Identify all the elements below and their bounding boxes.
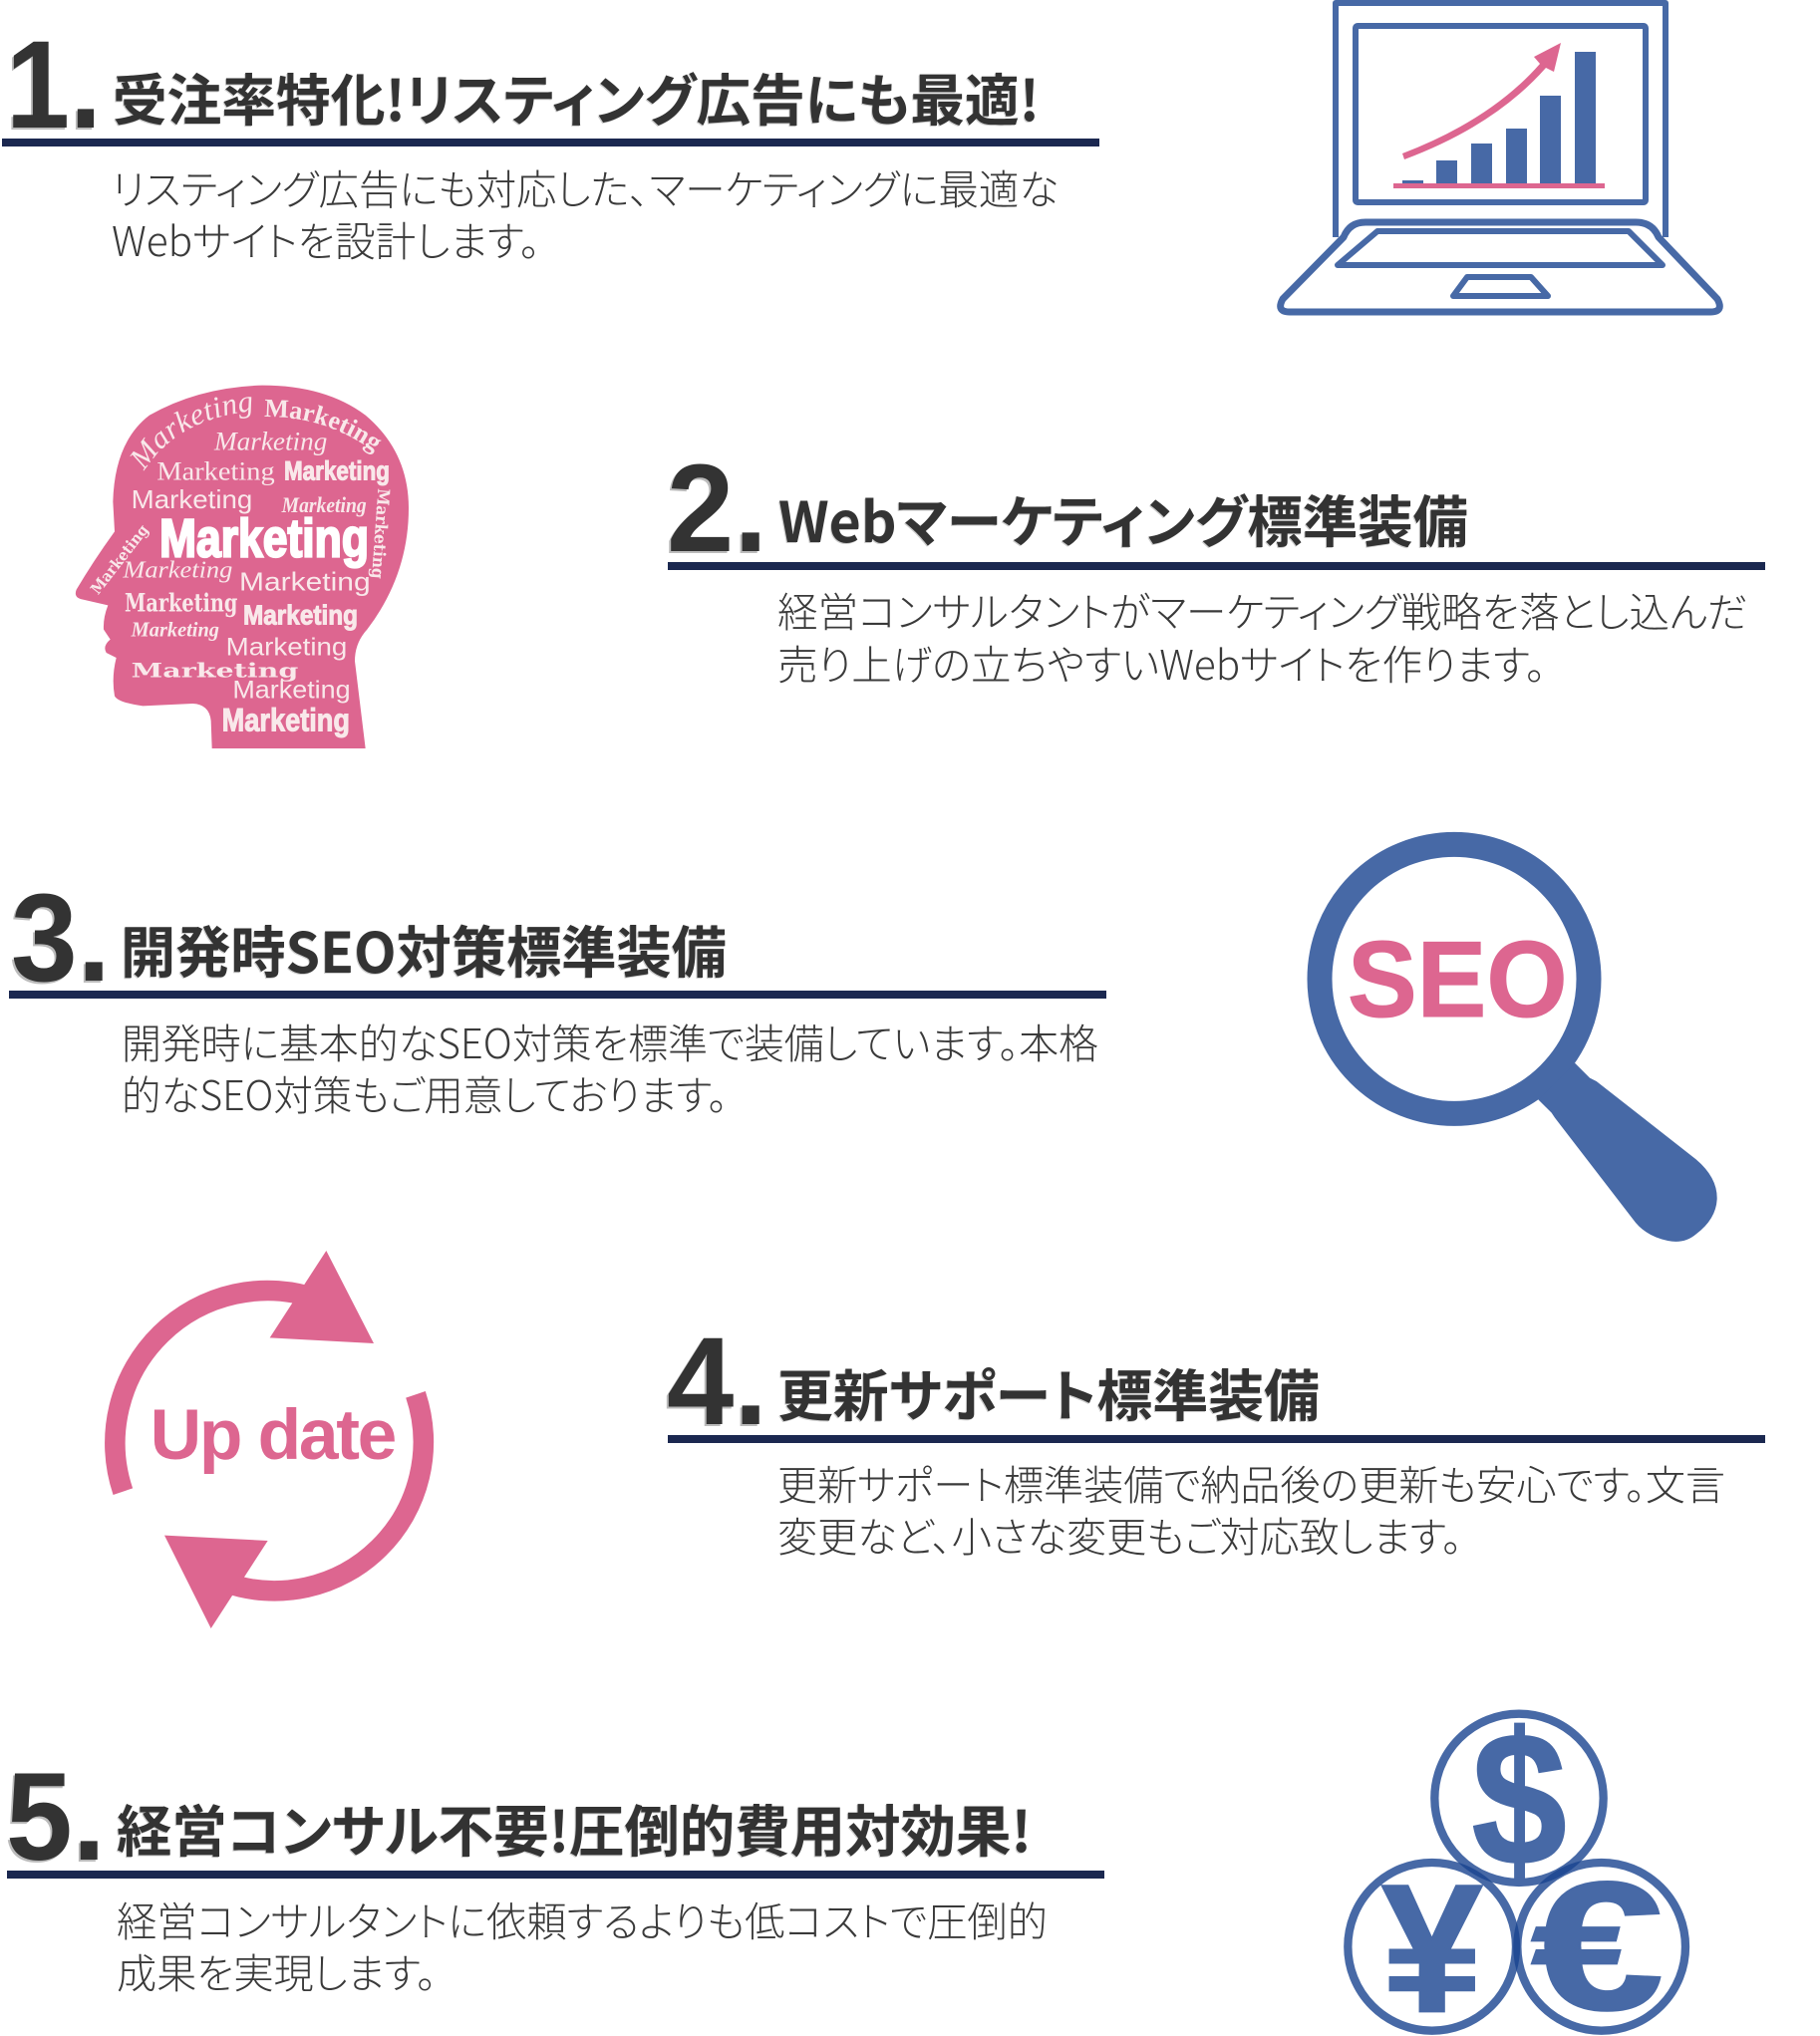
number 4: 4. xyxy=(667,1312,767,1451)
word cloud: Marketing xyxy=(132,659,299,682)
number 5: 5. xyxy=(6,1748,106,1887)
word cloud: Marketing xyxy=(226,634,347,661)
body text 2: 売り上げの立ちやすいWebサイトを作ります。 xyxy=(777,632,1546,692)
growth arrow xyxy=(1402,43,1561,159)
icon: head with marketing words xyxy=(76,385,409,748)
panel: section 2 web marketing xyxy=(667,439,1765,692)
number 3: 3. xyxy=(11,869,111,1008)
word cloud: Marketing xyxy=(243,600,358,631)
icon: magnifying glass seo xyxy=(1320,844,1717,1242)
dollar symbol: $ xyxy=(1472,1694,1567,1905)
panel: section 1 listing ads xyxy=(2,16,1099,268)
body text 5: 成果を実現します。 xyxy=(117,1940,437,2000)
body text 1: Webサイトを設計します。 xyxy=(112,208,540,268)
word cloud: Marketing xyxy=(122,557,232,583)
body text 3 xyxy=(122,1011,1098,1122)
heading 2: Webマーケティング標準装備 xyxy=(778,478,1468,559)
word cloud: Marketing xyxy=(264,399,381,454)
word cloud xyxy=(87,397,394,737)
body text 2: 経営コンサルタントがマーケティング戦略を落とし込んだ xyxy=(777,579,1748,639)
icon: currency coins xyxy=(1348,1694,1685,2036)
body text 3: 的なSEO対策もご用意しております。 xyxy=(122,1062,728,1122)
chart bars xyxy=(1402,52,1596,184)
icon: laptop with growth chart xyxy=(1281,3,1719,312)
body text 1: リスティング広告にも対応した、マーケティングに最適な xyxy=(112,156,1059,216)
word cloud: Marketing xyxy=(213,427,327,456)
seo label: SEO xyxy=(1348,920,1568,1040)
word cloud: Marketing xyxy=(132,484,252,514)
body text 5 xyxy=(117,1889,1048,2000)
number 1: 1. xyxy=(6,16,102,154)
body text 2 xyxy=(777,579,1748,692)
body text 4: 更新サポート標準装備で納品後の更新も安心です。文言 xyxy=(777,1452,1725,1512)
heading 4: 更新サポート標準装備 xyxy=(777,1352,1320,1433)
body text 3: 開発時に基本的なSEO対策を標準で装備しています。本格 xyxy=(122,1011,1098,1070)
heading 1: 受注率特化!リスティング広告にも最適! xyxy=(113,57,1040,138)
word cloud: Marketing xyxy=(159,510,369,569)
body text 4: 変更など、小さな変更もご対応致します。 xyxy=(777,1504,1462,1564)
word cloud: Marketing xyxy=(284,456,390,486)
word cloud: Marketing xyxy=(281,492,367,517)
word cloud: Marketing xyxy=(87,521,152,598)
body text 5: 経営コンサルタントに依頼するよりも低コストで圧倒的 xyxy=(117,1889,1048,1948)
number 2: 2. xyxy=(667,439,767,578)
word cloud: Marketing xyxy=(239,567,371,597)
panel: section 3 seo xyxy=(9,869,1106,1122)
panel: section 5 cost xyxy=(6,1748,1104,2000)
word cloud: Marketing xyxy=(130,397,251,470)
word cloud: Marketing xyxy=(125,587,238,617)
body text 4 xyxy=(777,1452,1725,1564)
body text 1 xyxy=(112,156,1059,268)
word cloud: Marketing xyxy=(232,678,351,705)
update label: Up date xyxy=(151,1395,397,1475)
word cloud: Marketing xyxy=(131,619,219,641)
word cloud: Marketing xyxy=(368,488,394,580)
panel: section 4 update support xyxy=(667,1312,1765,1564)
heading 5: 経営コンサル不要!圧倒的費用対効果! xyxy=(117,1788,1032,1869)
heading 3: 開発時SEO対策標準装備 xyxy=(121,909,727,990)
word cloud: Marketing xyxy=(222,702,350,737)
word cloud: Marketing xyxy=(156,457,275,486)
icon: update arrows xyxy=(115,1251,424,1628)
